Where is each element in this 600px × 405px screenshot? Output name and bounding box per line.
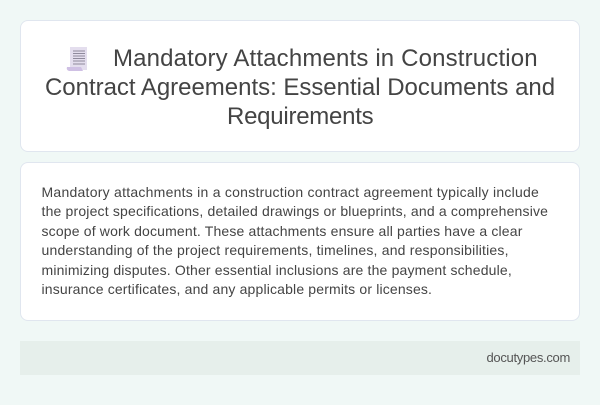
title line 2: Contract Agreements: Essential Documents and	[45, 74, 555, 101]
panel: title card	[20, 20, 580, 152]
footer bar	[20, 341, 580, 375]
title: Mandatory Attachments in Construction	[113, 45, 538, 72]
description line 2: the project specifications, detailed drawings or blueprints, and a comprehensive	[42, 203, 548, 219]
icon: document scroll	[66, 47, 87, 71]
footer source text: docutypes.com	[486, 350, 570, 365]
panel: description card	[20, 162, 580, 321]
description line 6: insurance certificates, and any applicable permits or licenses.	[42, 281, 432, 297]
title line 3: Requirements	[227, 103, 373, 130]
description text: Mandatory attachments in a construction contract agreement typically include	[42, 184, 539, 200]
description line 4: understanding of the project requirements, timelines, and responsibilities,	[42, 242, 509, 258]
description line 5: minimizing disputes. Other essential inclusions are the payment schedule,	[42, 262, 512, 278]
description line 3: scope of work document. These attachments ensure all parties have a clear	[42, 223, 523, 239]
